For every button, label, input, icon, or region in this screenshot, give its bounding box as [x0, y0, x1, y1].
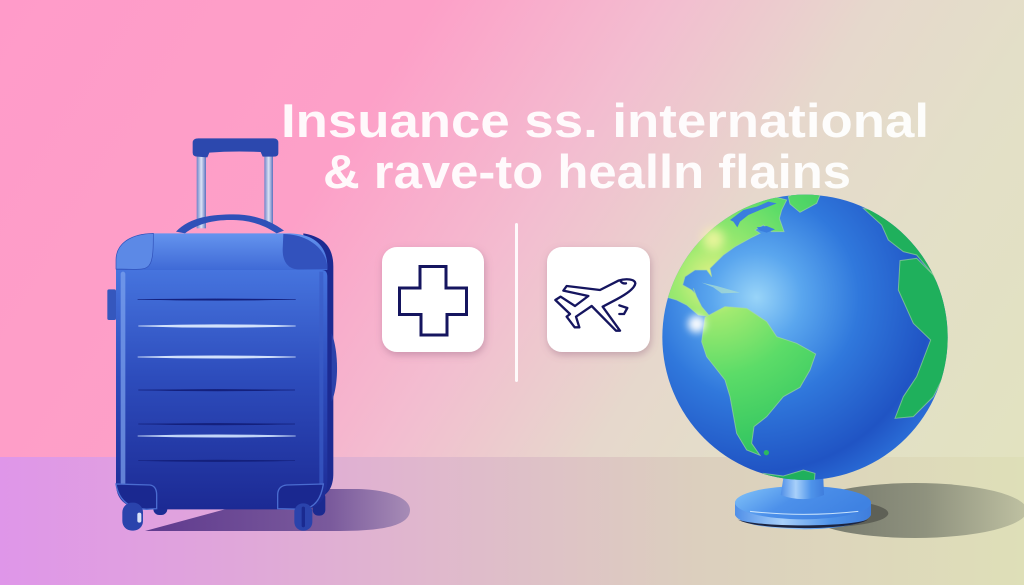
light rib 2 — [138, 356, 296, 358]
Africa — [895, 258, 950, 418]
side strap — [332, 333, 337, 402]
top right corner guard — [283, 234, 327, 269]
base top — [735, 486, 871, 519]
icon: airplane — [555, 279, 635, 331]
Antarctica — [762, 470, 816, 480]
dark rib 3 — [138, 423, 295, 425]
Europe — [863, 208, 937, 275]
bottom left corner guard — [116, 484, 157, 509]
highlight on North America — [703, 229, 724, 250]
Gulf of St Lawrence — [757, 226, 775, 233]
pull handle — [193, 138, 278, 157]
top left corner guard — [116, 233, 153, 269]
continents — [665, 192, 950, 487]
Greenland — [788, 192, 820, 212]
side tab — [107, 289, 116, 320]
light rib 3 — [138, 435, 296, 437]
small island — [764, 450, 769, 455]
divider — [515, 223, 518, 382]
Caribbean islands — [702, 283, 740, 293]
base rim — [735, 502, 871, 529]
front left wheel — [122, 503, 143, 531]
suitcase — [107, 138, 337, 531]
floor — [0, 457, 1024, 585]
right edge stripe — [319, 272, 323, 485]
body ribs — [138, 299, 296, 462]
Hudson Bay — [730, 202, 777, 227]
dark rib 2 — [138, 389, 295, 391]
telescopic poles — [197, 153, 273, 228]
suitcase floor shadow — [145, 489, 410, 531]
ocean — [662, 195, 948, 480]
base rim highlight — [750, 511, 858, 514]
small inner wheel — [153, 500, 167, 515]
carry handle — [176, 214, 284, 233]
suitcase body — [116, 270, 327, 509]
glare on globe edge — [688, 315, 705, 333]
icon: medical cross — [400, 266, 466, 335]
icon card: airplane — [547, 247, 650, 352]
base dark underline — [737, 519, 868, 528]
South America — [702, 307, 816, 455]
dark rib 4 — [138, 460, 295, 462]
title line 2: & rave-to healln flains — [323, 145, 851, 198]
front right wheel — [294, 503, 312, 531]
light rib 1 — [138, 325, 296, 327]
North America — [665, 197, 787, 317]
dark rib 1 — [138, 299, 296, 300]
suitcase top panel — [116, 233, 327, 270]
rear wheels — [313, 492, 325, 516]
globe — [662, 192, 950, 529]
globe neck — [781, 478, 824, 499]
globe base — [735, 486, 888, 529]
globe floor shadow — [803, 483, 1024, 538]
bottom right corner guard — [278, 484, 323, 509]
left edge highlight — [121, 272, 125, 488]
base shadow — [752, 499, 888, 527]
title line 1: Insuance ss. international — [281, 94, 929, 147]
icon card: medical cross — [382, 247, 484, 352]
back edge of shell — [303, 233, 333, 497]
title — [281, 94, 929, 198]
